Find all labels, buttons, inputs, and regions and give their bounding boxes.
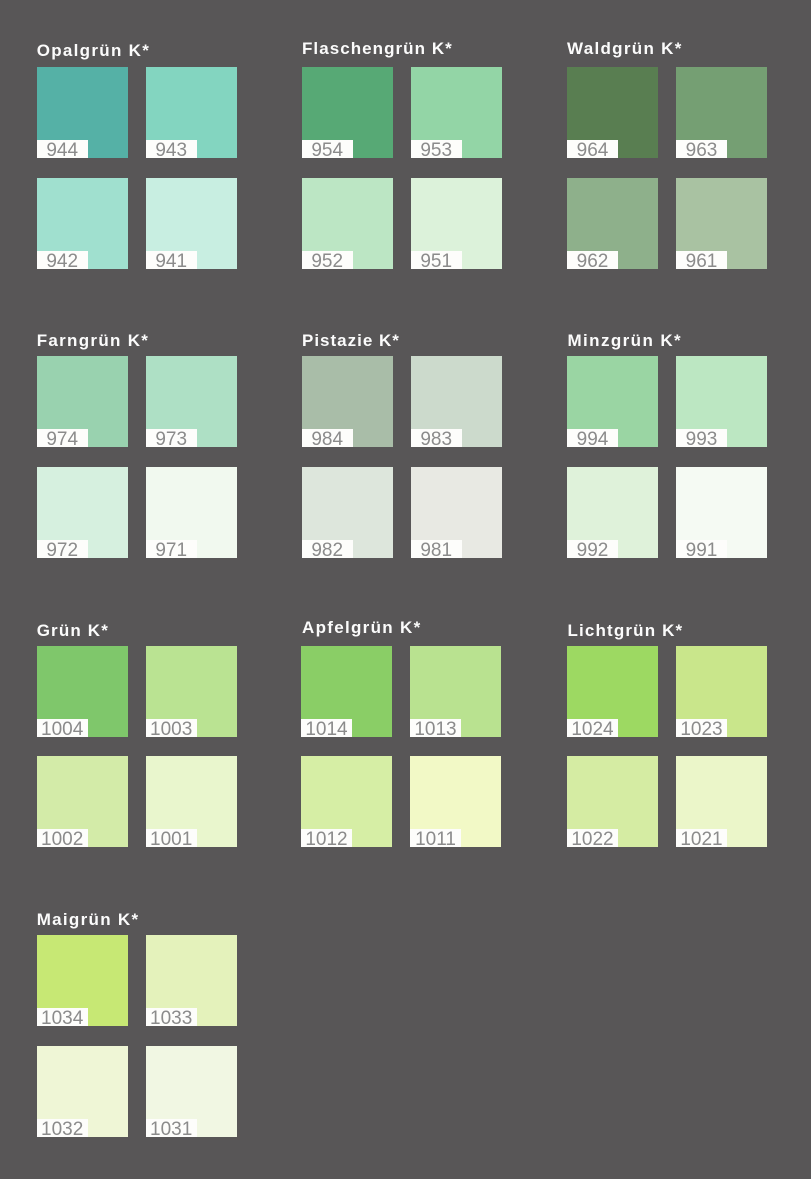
- swatch 952: [302, 178, 393, 269]
- panel: Maigrün K*: [37, 910, 237, 1137]
- swatch 1023: [676, 646, 767, 736]
- swatch 1022: [567, 756, 658, 846]
- swatch 963: [676, 67, 767, 158]
- swatch 994: [567, 356, 658, 447]
- swatch 992: [567, 467, 658, 558]
- heading: Flaschengrün K*: Flaschengrün K*: [302, 39, 453, 58]
- swatch 942: [37, 178, 128, 269]
- swatch 973: [146, 356, 237, 447]
- panel: Opalgrün K*: [37, 41, 237, 269]
- swatch 951: [411, 178, 502, 269]
- swatch 1002: [37, 756, 128, 846]
- swatch 1024: [567, 646, 658, 736]
- swatch 1003: [146, 646, 237, 736]
- heading: Waldgrün K*: Waldgrün K*: [567, 39, 683, 58]
- swatch 1001: [146, 756, 237, 846]
- swatch 993: [676, 356, 767, 447]
- swatch 984: [302, 356, 393, 447]
- heading: Grün K*: Grün K*: [37, 620, 109, 640]
- panel: Lichtgrün K*: [567, 620, 767, 847]
- heading: Pistazie K*: Pistazie K*: [302, 331, 400, 350]
- panel: Farngrün K*: [37, 331, 237, 558]
- swatch 1013: [410, 646, 501, 736]
- swatch 941: [146, 178, 237, 269]
- swatch 991: [676, 467, 767, 558]
- swatch 982: [302, 467, 393, 558]
- panel: Grün K*: [37, 620, 237, 847]
- swatch 1004: [37, 646, 128, 736]
- panel: Flaschengrün K*: [302, 39, 502, 269]
- swatch 983: [411, 356, 502, 447]
- heading: Farngrün K*: Farngrün K*: [37, 331, 149, 350]
- swatch 1034: [37, 935, 128, 1026]
- heading: Maigrün K*: Maigrün K*: [37, 910, 139, 929]
- swatch 944: [37, 67, 128, 158]
- swatch 1032: [37, 1046, 128, 1137]
- swatch 974: [37, 356, 128, 447]
- swatch 971: [146, 467, 237, 558]
- swatch 1014: [301, 646, 392, 736]
- heading: Lichtgrün K*: Lichtgrün K*: [568, 620, 683, 640]
- swatch 943: [146, 67, 237, 158]
- swatch 1011: [410, 756, 501, 846]
- panel: Apfelgrün K*: [301, 618, 501, 847]
- heading: Apfelgrün K*: Apfelgrün K*: [302, 618, 421, 636]
- swatch 961: [676, 178, 767, 269]
- swatch 1031: [146, 1046, 237, 1137]
- panel: Minzgrün K*: [567, 331, 767, 558]
- swatch 954: [302, 67, 393, 158]
- swatch 1012: [301, 756, 392, 846]
- swatch 1021: [676, 756, 767, 846]
- swatch 972: [37, 467, 128, 558]
- swatch 981: [411, 467, 502, 558]
- swatch 962: [567, 178, 658, 269]
- swatch 964: [567, 67, 658, 158]
- swatch 953: [411, 67, 502, 158]
- heading: Opalgrün K*: Opalgrün K*: [37, 41, 150, 60]
- swatch 1033: [146, 935, 237, 1026]
- heading: Minzgrün K*: Minzgrün K*: [568, 331, 682, 350]
- panel: Waldgrün K*: [567, 39, 767, 269]
- panel: Pistazie K*: [302, 331, 502, 558]
